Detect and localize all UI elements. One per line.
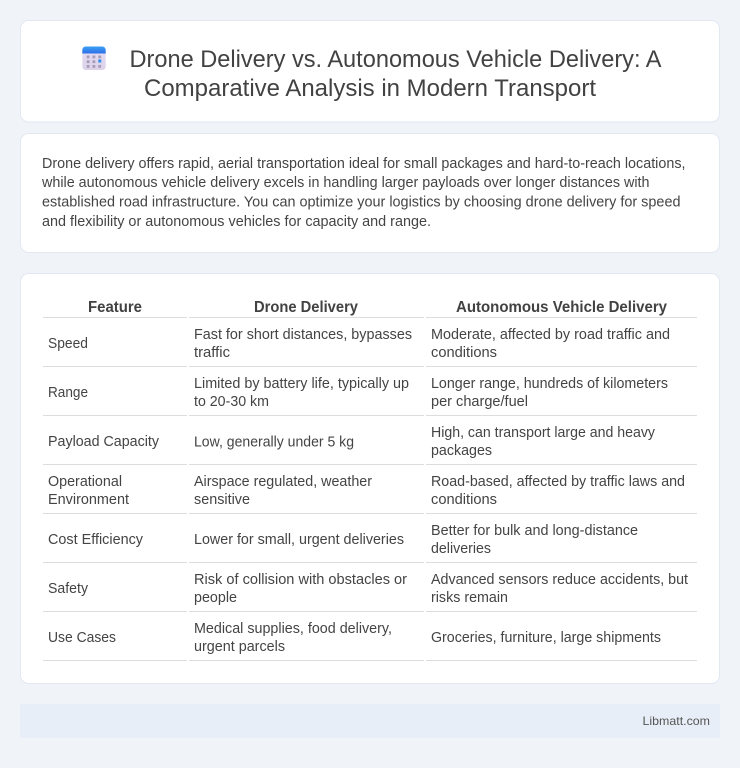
- row: safety: Risk of collision with obstacles or: [194, 572, 407, 588]
- row: range: per charge/fuel: [431, 394, 528, 410]
- row: speed: [48, 327, 670, 361]
- row: range: Longer range, hundreds of kilometers: [431, 376, 668, 392]
- intro paragraph: and flexibility or autonomous vehicles for capacity and range.: [42, 214, 431, 230]
- row: operational environment: Airspace regulated, weather: [194, 474, 372, 490]
- footer: Libmatt.com: [642, 714, 710, 728]
- row: safety: [48, 572, 688, 606]
- row: range: Limited by battery life, typically up: [194, 376, 409, 392]
- table header: Feature: [88, 299, 142, 316]
- row: speed: Speed: [48, 336, 88, 352]
- row: speed: Moderate, affected by road traffic and: [431, 327, 670, 343]
- intro paragraph: Drone delivery offers rapid, aerial transportation ideal for small packages and hard-to-reach locations,: [42, 156, 686, 172]
- row: safety: Safety: [48, 581, 89, 597]
- title: Drone Delivery vs. Autonomous Vehicle Delivery: A: [130, 46, 662, 73]
- row: payload capacity: [48, 425, 656, 459]
- intro paragraph: established road infrastructure. You can optimize your logistics by choosing drone delivery for speed: [42, 194, 680, 210]
- panel: title card: [20, 20, 720, 122]
- table header: Drone Delivery: [254, 299, 358, 316]
- row: range: to 20-30 km: [194, 394, 269, 410]
- row: use cases: Use Cases: [48, 630, 116, 646]
- row: operational environment: Road-based, affected by traffic laws and: [431, 474, 685, 490]
- row: use cases: Groceries, furniture, large shipments: [431, 630, 661, 646]
- row: safety: Advanced sensors reduce accidents, but: [431, 572, 688, 588]
- row: operational environment: conditions: [431, 492, 497, 508]
- row: operational environment: [48, 474, 685, 508]
- row: operational environment: Operational: [48, 474, 122, 490]
- row: cost efficiency: Lower for small, urgent deliveries: [194, 532, 404, 548]
- row: cost efficiency: Better for bulk and long-distance: [431, 523, 638, 539]
- row: payload capacity: Low, generally under 5 kg: [194, 434, 354, 450]
- row: use cases: [48, 621, 661, 655]
- table header: Autonomous Vehicle Delivery: [456, 299, 667, 316]
- row: safety: risks remain: [431, 590, 508, 606]
- footer: [20, 704, 720, 738]
- row: speed: Fast for short distances, bypasses: [194, 327, 412, 343]
- row: safety: people: [194, 590, 237, 606]
- row: cost efficiency: deliveries: [431, 541, 491, 557]
- row: use cases: urgent parcels: [194, 639, 285, 655]
- row: speed: conditions: [431, 345, 497, 361]
- intro paragraph: while autonomous vehicle delivery excels in handling larger payloads over longer distances with: [41, 175, 649, 191]
- table header: [88, 299, 667, 316]
- row: use cases: Medical supplies, food delivery,: [194, 621, 392, 637]
- row: payload capacity: High, can transport large and heavy: [431, 425, 656, 441]
- intro paragraph: [41, 156, 685, 230]
- row: cost efficiency: Cost Efficiency: [48, 532, 144, 548]
- panel: introduction: [20, 134, 720, 252]
- row: speed: traffic: [194, 345, 230, 361]
- row: payload capacity: Payload Capacity: [48, 434, 160, 450]
- title: [130, 46, 662, 102]
- row: range: [48, 376, 668, 410]
- row: operational environment: Environment: [48, 492, 129, 508]
- title: Comparative Analysis in Modern Transport: [144, 75, 596, 102]
- row: cost efficiency: [48, 523, 638, 557]
- row: range: Range: [48, 385, 88, 401]
- row: operational environment: sensitive: [194, 492, 250, 508]
- icon: calendar: [82, 46, 106, 70]
- panel: comparison table: [20, 274, 720, 684]
- row: payload capacity: packages: [431, 443, 492, 459]
